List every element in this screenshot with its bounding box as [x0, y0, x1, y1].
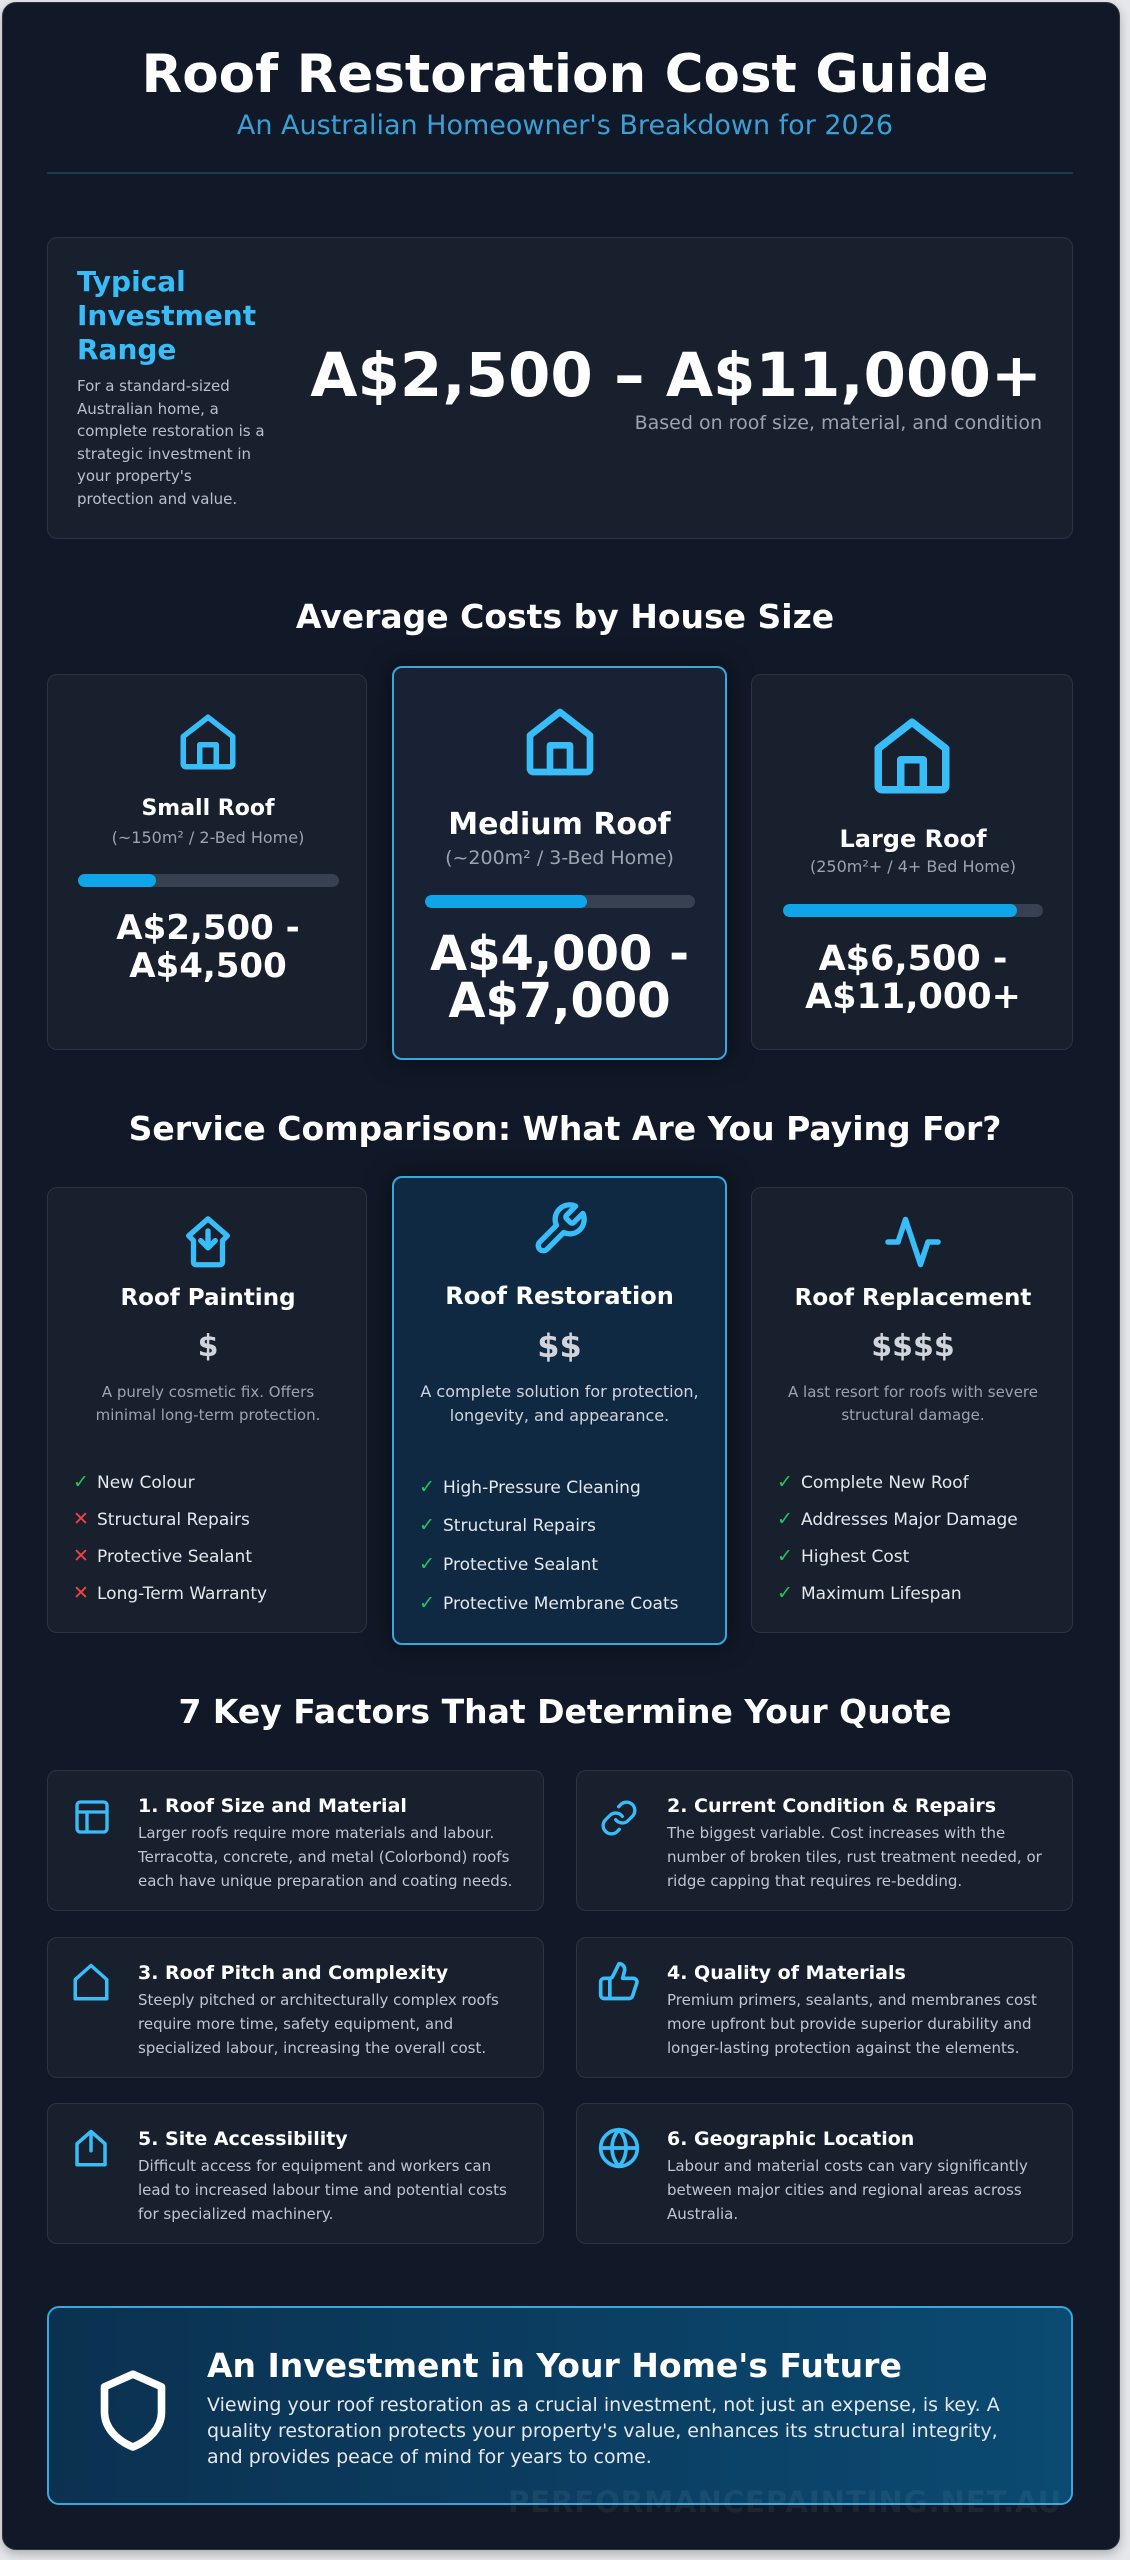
title: Roof Restoration Cost Guide	[141, 44, 989, 105]
price	[430, 926, 689, 1029]
feature list: ✓	[777, 1508, 793, 1530]
feature list: New Colour	[97, 1473, 195, 1493]
feature list: Complete New Roof	[801, 1473, 969, 1493]
label: Small Roof	[141, 796, 275, 821]
feature list: High-Pressure Cleaning	[443, 1478, 641, 1498]
price	[116, 908, 300, 986]
feature list: Addresses Major Damage	[801, 1510, 1018, 1530]
price: A$11,000+	[805, 977, 1021, 1017]
feature list: Protective Membrane Coats	[443, 1594, 678, 1614]
feature list: ✓	[777, 1582, 793, 1604]
subtitle: An Australian Homeowner's Breakdown for 2026	[237, 110, 893, 141]
feature list: ✓	[419, 1476, 435, 1498]
icon: globe	[598, 2128, 640, 2168]
panel: roof restoration: Roof Restoration	[445, 1282, 674, 1310]
icon: house outline	[74, 1964, 108, 2000]
price: A$7,000	[448, 973, 671, 1029]
callout: investment in future: Viewing your roof restoration as a crucial investment, not just an expense, is key. A quality restoration protects your property's value, enhances its structural integrity, and provides peace of mind for years to come.	[207, 2394, 1000, 2468]
panel: roof painting: Roof Painting	[120, 1285, 296, 1311]
factor 4	[576, 1937, 1073, 2078]
factor 1: Larger roofs require more materials and labour. Terracotta, concrete, and metal (Colorbond) roofs each have unique preparation and coating needs.	[138, 1824, 512, 1890]
factor 4: Premium primers, sealants, and membranes cost more upfront but provide superior durability and longer-lasting protection against the elements.	[667, 1991, 1037, 2057]
panel: roof painting	[47, 1187, 367, 1633]
panel: roof replacement: $$$$	[871, 1329, 955, 1364]
feature list: Protective Sealant	[97, 1547, 252, 1567]
feature list: ✓	[419, 1514, 435, 1536]
icon: wrench	[536, 1202, 587, 1254]
panel: large roof: (250m²+ / 4+ Bed Home)	[810, 857, 1016, 876]
bar	[783, 904, 1043, 917]
label: Medium Roof	[448, 807, 671, 842]
feature list: ✓	[777, 1471, 793, 1493]
feature list: Maximum Lifespan	[801, 1584, 962, 1604]
panel: roof restoration: A complete solution for protection, longevity, and appearance.	[420, 1382, 699, 1425]
feature list: ✓	[777, 1545, 793, 1567]
feature list	[73, 1471, 267, 1604]
icon: house	[526, 708, 594, 776]
factor 5	[47, 2103, 544, 2244]
big range figure: A$2,500 – A$11,000+	[310, 340, 1042, 411]
callout: investment in future: An Investment in Your Home's Future	[207, 2346, 902, 2385]
panel: roof replacement	[751, 1187, 1073, 1633]
factor 6: 6. Geographic Location	[667, 2128, 914, 2150]
label: Large Roof	[839, 825, 987, 853]
icon: house	[874, 718, 950, 794]
heading: key factors: 7 Key Factors That Determine Your Quote	[178, 1692, 952, 1731]
caption: Based on roof size, material, and condition	[635, 412, 1042, 434]
icon: upload house	[75, 2130, 107, 2166]
price: A$6,500 -	[819, 939, 1007, 979]
panel: roof replacement: A last resort for roofs with severe structural damage.	[788, 1383, 1038, 1424]
feature list: ✕	[73, 1508, 89, 1530]
factor 3: 3. Roof Pitch and Complexity	[138, 1962, 448, 1984]
factor 1: 1. Roof Size and Material	[138, 1795, 407, 1817]
feature list: ✕	[73, 1582, 89, 1604]
factor 3	[47, 1937, 544, 2078]
factor 2: The biggest variable. Cost increases with the number of broken tiles, rust treatment needed, or ridge capping that requires re-bedding.	[667, 1824, 1042, 1890]
heading: service comparison: Service Comparison: What Are You Paying For?	[129, 1109, 1001, 1148]
factor 6	[576, 2103, 1073, 2244]
feature list: Protective Sealant	[443, 1555, 598, 1575]
feature list: Long-Term Warranty	[97, 1584, 267, 1604]
icon: shield	[100, 2370, 166, 2451]
icon: paint house	[186, 1216, 230, 1268]
factor 6: Labour and material costs can vary significantly between major cities and regional areas across Australia.	[667, 2157, 1028, 2223]
feature list: ✕	[73, 1545, 89, 1567]
watermark: PERFORMANCEPAINTING.NET.AU	[508, 2485, 1062, 2519]
feature list	[777, 1471, 1018, 1604]
price: A$4,000 -	[430, 926, 689, 982]
panel: roof restoration: $$	[537, 1327, 582, 1365]
icon: pulse	[885, 1216, 941, 1268]
panel: roof painting: $	[198, 1329, 218, 1364]
panel: roof restoration	[392, 1176, 727, 1645]
icon: thumbs up	[598, 1962, 639, 2000]
price: A$2,500 -	[116, 908, 300, 948]
panel: roof painting: A purely cosmetic fix. Offers minimal long-term protection.	[96, 1383, 320, 1424]
feature list: ✓	[419, 1553, 435, 1575]
panel: roof replacement: Roof Replacement	[795, 1285, 1031, 1311]
price: A$4,500	[129, 946, 287, 986]
bar	[425, 895, 695, 908]
feature list: Structural Repairs	[97, 1510, 250, 1530]
heading: average costs: Average Costs by House Size	[296, 597, 834, 636]
icon: layout	[75, 1800, 109, 1834]
panel: medium roof	[392, 666, 727, 1060]
icon: house	[180, 714, 236, 770]
icon: link	[602, 1800, 636, 1836]
feature list: ✓	[73, 1471, 89, 1493]
feature list: ✓	[419, 1592, 435, 1614]
heading: typical investment range: Typical Investment Range	[77, 265, 256, 366]
panel: medium roof: (~200m² / 3-Bed Home)	[445, 847, 674, 869]
factor 2	[576, 1770, 1073, 1911]
factor 2: 2. Current Condition & Repairs	[667, 1795, 996, 1817]
factor 1	[47, 1770, 544, 1911]
feature list: Highest Cost	[801, 1547, 909, 1567]
factor 5: Difficult access for equipment and workers can lead to increased labour time and potential costs for specialized machinery.	[138, 2157, 507, 2223]
panel: typical investment range	[47, 237, 1073, 539]
price	[805, 939, 1021, 1017]
callout: investment in future	[47, 2306, 1073, 2505]
factor 4: 4. Quality of Materials	[667, 1962, 906, 1984]
bar	[78, 874, 339, 887]
factor 5: 5. Site Accessibility	[138, 2128, 348, 2150]
panel: small roof	[47, 674, 367, 1050]
feature list: Structural Repairs	[443, 1516, 596, 1536]
panel: small roof: (~150m² / 2-Bed Home)	[112, 828, 304, 847]
feature list	[419, 1476, 678, 1614]
panel: large roof	[751, 674, 1073, 1050]
text: description: For a standard-sized Australian home, a complete restoration is a strategic investment in your property's protection and value.	[77, 377, 265, 508]
factor 3: Steeply pitched or architecturally complex roofs require more time, safety equipment, and specialized labour, increasing the overall cost.	[138, 1991, 499, 2057]
